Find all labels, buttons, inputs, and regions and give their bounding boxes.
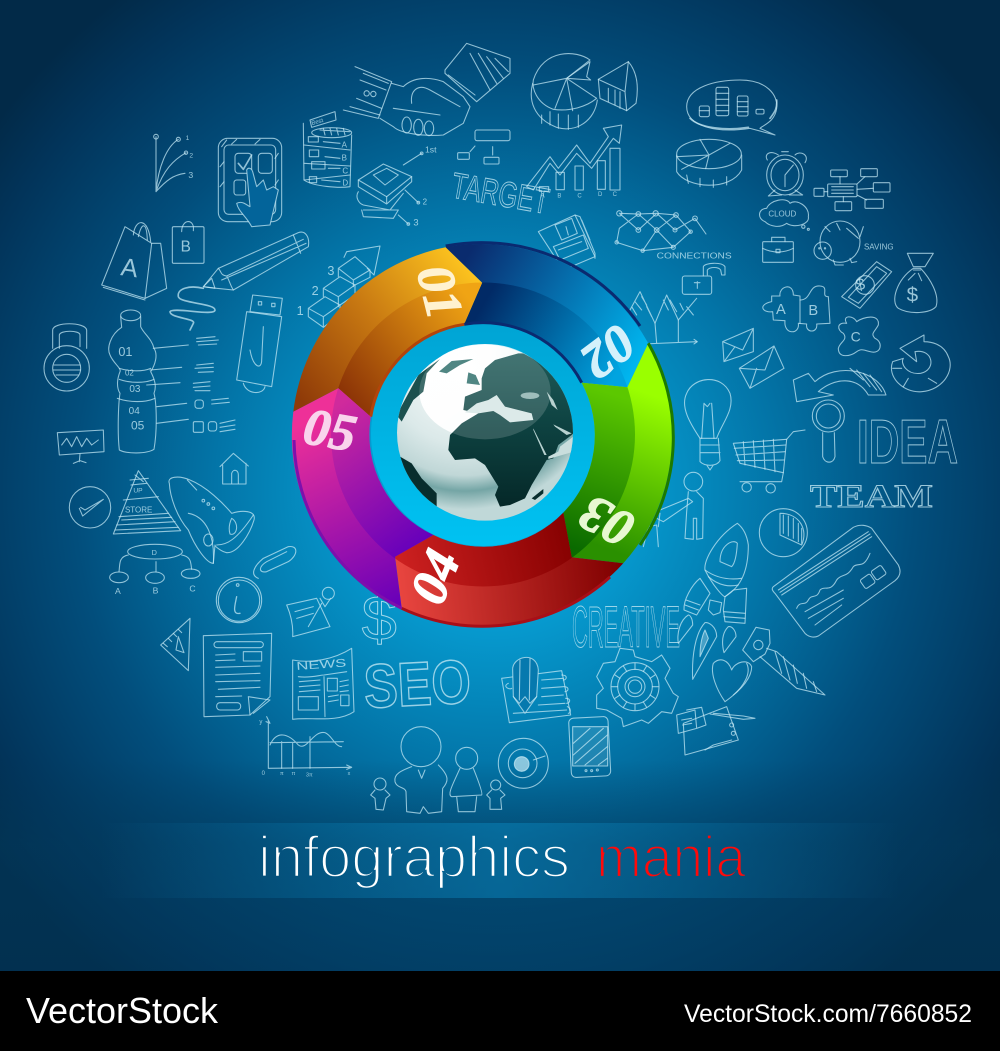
icon: layered bottle list: 05 bbox=[131, 418, 145, 432]
icon: pencil with squiggle bbox=[170, 232, 309, 330]
icon: alarm clock bbox=[766, 152, 806, 196]
icon: smartphone bbox=[568, 716, 611, 778]
globe bbox=[397, 344, 575, 521]
icon: curve lines: 3 bbox=[188, 170, 193, 180]
icon: function graph: y bbox=[259, 719, 262, 725]
icon: padlock bbox=[44, 324, 89, 391]
segment 04 red bbox=[395, 513, 623, 626]
icon: stack of books: 2 bbox=[423, 198, 428, 207]
icon: paper clip bbox=[254, 546, 296, 578]
icon: circular arrow diagram bbox=[891, 335, 950, 392]
land: British Isles bbox=[467, 372, 480, 385]
icon: envelopes bbox=[723, 328, 784, 388]
icon: notebook with pencil bbox=[502, 657, 571, 723]
icon: big curved arrow bbox=[793, 368, 886, 402]
icon: bar chart with arrow: B bbox=[557, 193, 561, 199]
icon: mind map bbox=[814, 169, 890, 211]
icon: puzzle AB: B bbox=[808, 303, 818, 319]
icon: pyramid: UP bbox=[133, 488, 143, 495]
icon: usb drive bbox=[237, 295, 282, 393]
icon: steps with arrow bbox=[297, 246, 380, 327]
icon: check circle bbox=[69, 487, 111, 528]
icon: steps with arrow: 2 bbox=[312, 284, 319, 298]
icon: org diagram: B bbox=[153, 585, 159, 595]
watermark logo: VectorStock bbox=[26, 990, 219, 1031]
icon: curve lines: 2 bbox=[189, 152, 193, 159]
icon: function graph: π bbox=[280, 771, 284, 777]
icon: layered bottle list: 02 bbox=[125, 368, 134, 377]
number 02: 02 bbox=[570, 313, 646, 390]
icon: stack of books: 3 bbox=[413, 217, 419, 227]
title word: mania: mania bbox=[596, 825, 747, 890]
icon: credit card bbox=[772, 525, 900, 637]
icon: stack of books: 1st bbox=[425, 145, 437, 155]
icon: layered bottle list: 03 bbox=[129, 384, 141, 395]
icon: light bulb bbox=[685, 380, 731, 470]
watermark id: VectorStock.com/7660852 bbox=[684, 1001, 972, 1028]
icon: banknote: $ bbox=[854, 274, 866, 295]
icon: puzzle AB bbox=[763, 286, 830, 332]
icon: stack of books bbox=[357, 145, 437, 227]
icon: steps with arrow: 3 bbox=[327, 264, 334, 278]
icon: money bag bbox=[895, 253, 937, 313]
bottom shade bbox=[0, 760, 1000, 971]
icon: flowchart bbox=[458, 130, 510, 164]
icon: rocket plane bbox=[169, 477, 254, 563]
icon: gear bbox=[597, 648, 678, 727]
title word: infographics: infographics bbox=[258, 825, 570, 890]
number 03: 03 bbox=[571, 483, 644, 558]
icon: newspaper bbox=[293, 648, 354, 719]
icon: bar chart with arrow: A bbox=[541, 193, 545, 199]
icon: function graph: π bbox=[292, 771, 296, 777]
icon: steps with arrow: 1 bbox=[297, 304, 304, 318]
doodles: upper right bbox=[527, 54, 950, 470]
icon: banknote bbox=[842, 262, 892, 308]
icon: org diagram bbox=[110, 544, 200, 596]
icon: 3d pie chart bbox=[531, 54, 637, 129]
icon: bar chart with arrow: D bbox=[598, 192, 603, 198]
icon: bar chart with arrow: C bbox=[577, 193, 582, 199]
land: Madagascar bbox=[532, 489, 543, 500]
number 04: 04 bbox=[400, 542, 472, 612]
footer bar bbox=[0, 971, 1000, 1051]
doodles: lower right bbox=[498, 430, 900, 788]
icon: org diagram: C bbox=[189, 583, 196, 593]
icon: piggy bank bbox=[814, 221, 894, 265]
icon: necktie bbox=[743, 627, 825, 695]
globe highlight on ocean bbox=[419, 344, 551, 439]
icon: layered bottle list: 04 bbox=[129, 406, 140, 417]
icon: heart bbox=[712, 660, 752, 702]
icon: shopping bag A: A bbox=[119, 253, 140, 283]
doodles: lower left bbox=[57, 430, 505, 813]
icon: puzzle piece C bbox=[838, 317, 880, 356]
segment 01 orange bbox=[293, 247, 482, 417]
inner blue ring bbox=[371, 322, 595, 546]
icon: document bbox=[203, 633, 272, 717]
icon: cloud bbox=[760, 200, 809, 230]
icon: bar chart with arrow bbox=[527, 125, 622, 199]
icon: floppy disk bbox=[538, 215, 595, 270]
icon: open lock bbox=[682, 263, 725, 294]
icon: ranked database: D bbox=[342, 179, 348, 188]
icon: org diagram: A bbox=[115, 586, 121, 596]
icon: function graph: 0 bbox=[262, 771, 266, 777]
icon: house bbox=[220, 453, 248, 484]
icon: rocket bbox=[678, 523, 748, 679]
icon: connections network bbox=[615, 211, 732, 261]
land: Iceland bbox=[439, 359, 473, 373]
icon: pyramid: STORE bbox=[125, 506, 152, 515]
icon: magnifying glass bbox=[812, 400, 844, 462]
text doodle: TARGET: TARGET bbox=[449, 165, 552, 222]
icon: man pushing bbox=[643, 472, 703, 547]
icon: money bag: $ bbox=[907, 284, 919, 307]
segment 03 green bbox=[563, 343, 673, 563]
icon: ranked database: Best bbox=[311, 118, 324, 127]
icon: connections network: CONNECTIONS bbox=[657, 251, 732, 261]
icon: flat pie chart bbox=[677, 139, 742, 187]
icon: layered bottle list: 01 bbox=[118, 345, 132, 359]
icon: ranked database: B bbox=[342, 154, 347, 163]
icon: curve lines: 1 bbox=[186, 135, 190, 142]
icon: pie circle bbox=[759, 509, 807, 557]
icon: handshake bbox=[343, 43, 510, 136]
land: Greenland bbox=[397, 359, 440, 422]
icon: newspaper: NEWS bbox=[296, 657, 347, 673]
icon: pinned note bbox=[287, 587, 334, 637]
icon: curve lines bbox=[154, 134, 193, 192]
title bbox=[263, 836, 745, 888]
land: Africa and Eurasia bbox=[448, 353, 575, 507]
globe gloss bbox=[419, 344, 551, 439]
icon: shopping bag B bbox=[172, 222, 204, 263]
icon: puzzle AB: A bbox=[776, 302, 786, 318]
icon: function graph: 3π bbox=[306, 773, 313, 779]
icon: function graph bbox=[259, 717, 352, 779]
icon: layered bottle list bbox=[109, 310, 235, 453]
text doodle: TEAM: TEAM bbox=[810, 479, 933, 515]
icon: tablet with hand bbox=[218, 138, 282, 227]
icon: cloud: CLOUD bbox=[768, 210, 797, 219]
icon: folder with papers and pen bbox=[677, 707, 755, 755]
icon: coffee cup bbox=[498, 738, 548, 788]
central ring diagram bbox=[292, 243, 673, 626]
segment 02 blue bbox=[446, 243, 648, 387]
icon: ranked database: A bbox=[342, 140, 348, 149]
segment 05 magenta bbox=[292, 388, 433, 608]
icon: org diagram: D bbox=[152, 548, 157, 557]
text doodle: SEO: SEO bbox=[362, 647, 473, 722]
icon: hatched area chart bbox=[630, 292, 697, 344]
title band bbox=[100, 823, 900, 898]
text: CREATIVE bbox=[572, 595, 680, 660]
icon: shopping bag B: B bbox=[181, 239, 191, 256]
icon: monitor chart bbox=[57, 430, 104, 463]
icon: triangle ruler bbox=[161, 618, 190, 671]
land: South America bbox=[400, 457, 437, 508]
icon: shopping bag A bbox=[102, 223, 167, 300]
icon: family figures bbox=[371, 727, 505, 813]
icon: puzzle piece C: C bbox=[851, 329, 861, 345]
icon: shopping cart bbox=[733, 430, 805, 493]
icon: ranked database bbox=[303, 112, 352, 188]
icon: piggy bank: SAVING bbox=[864, 242, 894, 251]
icon: dollar sign: $ bbox=[362, 584, 397, 654]
number 05: 05 bbox=[299, 398, 360, 463]
icon: speech bubble with bars bbox=[687, 80, 777, 135]
doodles: upper left bbox=[44, 43, 510, 453]
icon: briefcase bbox=[763, 237, 793, 262]
icon: ranked database: C bbox=[342, 166, 348, 175]
icon: function graph: x bbox=[348, 771, 351, 777]
icon: info circle bbox=[216, 577, 262, 623]
icon: bar chart with arrow: C bbox=[613, 192, 618, 198]
number 01: 01 bbox=[405, 260, 473, 324]
icon: pyramid bbox=[113, 471, 181, 534]
